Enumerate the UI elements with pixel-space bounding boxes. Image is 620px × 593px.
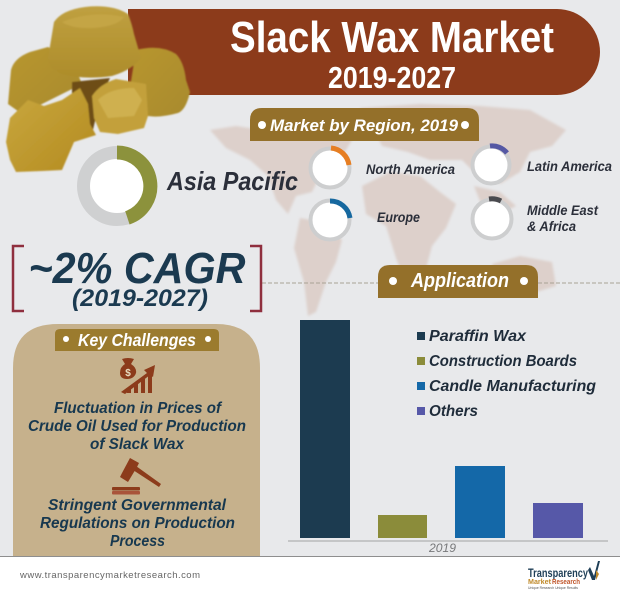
heading pill: Market by Region: Market by Region, 2019 [270, 116, 459, 135]
donut: North America [310, 148, 350, 188]
text: fluctuation in prices: Crude Oil Used for Production [28, 418, 246, 435]
icon: gavel [112, 458, 161, 494]
chart legend: Paraffin Wax [429, 328, 527, 345]
donut: Middle East and Africa [472, 199, 512, 238]
panel: key challenges [13, 324, 260, 556]
logo: Transparency Market Research: Transparency [528, 566, 588, 580]
CAGR callout: ~2% CAGR [28, 244, 246, 293]
heading pill: Application: Application [410, 270, 509, 292]
footer rule [0, 556, 620, 558]
text: fluctuation in prices [28, 400, 246, 453]
logo: Transparency Market Research [528, 561, 600, 590]
subtitle years: 2019-2027 [328, 60, 456, 95]
text: fluctuation in prices: Fluctuation in Prices of [54, 400, 223, 417]
icon: money bag and rising chart: $ [125, 368, 131, 379]
heading pill: Market by Region [250, 108, 479, 141]
divider: dashed line [262, 282, 620, 284]
footer website: www.transparencymarketresearch.com [19, 570, 200, 581]
label: Asia Pacific: Asia Pacific [166, 166, 298, 196]
label: Latin America: Latin America [527, 158, 612, 174]
logo: Transparency Market Research: Market [528, 579, 552, 586]
CAGR callout: (2019-2027) [72, 285, 208, 312]
bar chart: application [288, 320, 608, 555]
title text: Slack Wax Market [230, 13, 554, 62]
donut: Latin America [472, 146, 510, 184]
label: Middle East and Africa [527, 202, 599, 234]
logo: Transparency Market Research: Research [552, 579, 580, 586]
image: slack wax blocks [6, 6, 190, 172]
label: Europe: Europe [377, 209, 420, 225]
label: Middle East and Africa: & Africa [527, 218, 576, 234]
bar: Paraffin Wax [300, 320, 350, 538]
text: stringent regulations: Regulations on Production [40, 515, 235, 532]
text: fluctuation in prices: of Slack Wax [90, 436, 185, 453]
chart legend: Others [429, 403, 478, 420]
donut: Europe [310, 200, 350, 240]
title banner [128, 9, 600, 95]
label: North America: North America [366, 161, 455, 177]
bar: Construction Boards [378, 515, 427, 538]
text: stringent regulations: Stringent Governmental [48, 497, 227, 514]
chart legend: Construction Boards [429, 353, 577, 370]
axis label: 2019: 2019 [428, 541, 456, 555]
text: stringent regulations: Process [110, 533, 165, 550]
chart legend [417, 328, 596, 420]
logo: Transparency Market Research: Unique Research Unique Results [528, 586, 578, 590]
heading pill: Key Challenges: Key Challenges [78, 330, 196, 350]
world map backdrop [210, 104, 566, 316]
bar: Others [533, 503, 583, 538]
CAGR callout [13, 244, 261, 312]
label: Middle East and Africa: Middle East [527, 202, 599, 218]
icon: money bag and rising chart [120, 358, 155, 394]
heading pill: Application [378, 265, 538, 298]
chart legend: Candle Manufacturing [429, 378, 596, 395]
donut: Asia Pacific [84, 152, 150, 220]
bar: Candle Manufacturing [455, 466, 505, 538]
text: stringent regulations [40, 497, 235, 550]
